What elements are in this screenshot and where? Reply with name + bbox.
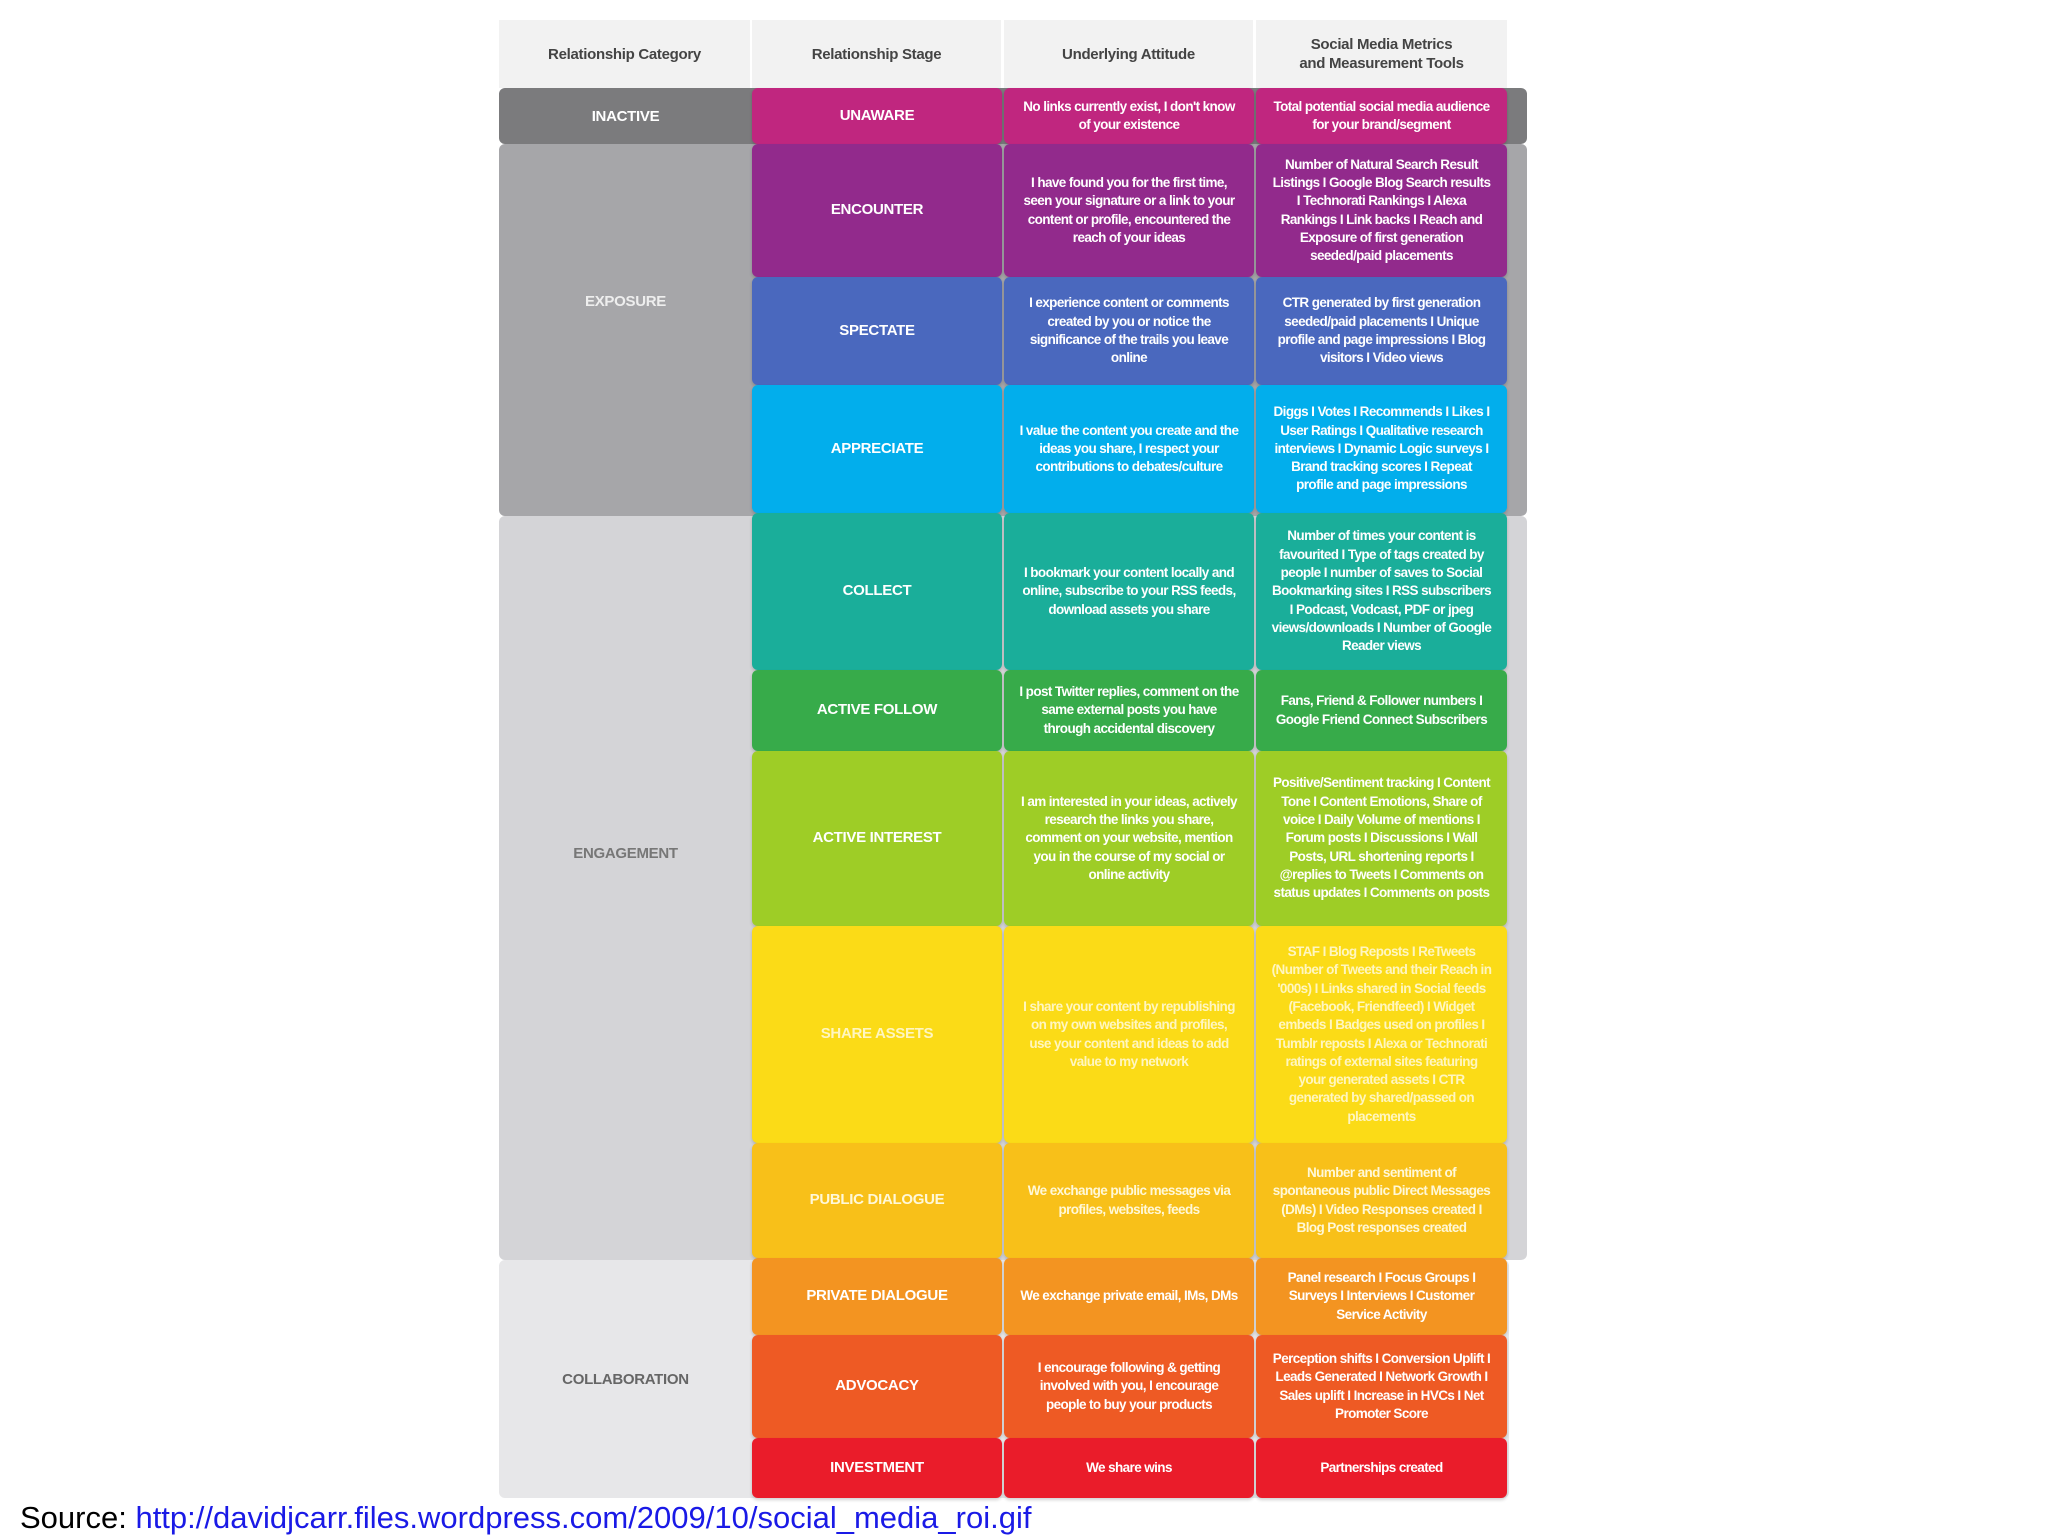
header: category — [499, 20, 750, 88]
text: Fans, Friend & Follower numbers I Google Friend Connect Subscribers — [1276, 693, 1487, 726]
text: Total potential social media audience for your brand/segment — [1273, 99, 1490, 132]
text: ACTIVE INTEREST — [813, 829, 941, 846]
text: Perception shifts I Conversion Uplift I Leads Generated I Network Growth I Sales uplift I Increase in HVCs I Net Promoter Score — [1273, 1351, 1490, 1421]
header: metrics — [1256, 20, 1507, 88]
text: I value the content you create and the ideas you share, I respect your contributions to debates/culture — [1020, 423, 1238, 474]
text: ACTIVE FOLLOW — [817, 701, 937, 718]
header: category: Relationship Category — [548, 46, 701, 62]
row: public dialogue — [750, 1143, 1508, 1260]
table header — [499, 20, 1507, 88]
header: attitude: Underlying Attitude — [1062, 46, 1195, 62]
row: encounter — [751, 144, 1508, 278]
text: CTR generated by first generation seeded/paid placements I Unique profile and page impressions I Blog visitors I Video views — [1278, 295, 1485, 365]
header: stage: Relationship Stage — [812, 46, 941, 62]
text: Partnerships created — [1320, 1460, 1443, 1475]
text: No links currently exist, I don't know of your existence — [1023, 99, 1235, 132]
text: UNAWARE — [840, 107, 914, 124]
header: stage — [752, 20, 1001, 88]
category: engagement: ENGAGEMENT — [573, 845, 678, 862]
row: appreciate — [751, 385, 1508, 514]
text: ENCOUNTER — [831, 201, 923, 218]
row: investment — [750, 1438, 1508, 1502]
category: collaboration — [499, 1260, 1509, 1498]
text: APPRECIATE — [831, 440, 923, 457]
row: active interest — [750, 751, 1508, 928]
text: We share wins — [1086, 1460, 1172, 1475]
category: engagement — [499, 516, 1527, 1260]
text: I post Twitter replies, comment on the same external posts you have through accidental discovery — [1019, 684, 1239, 736]
text: INVESTMENT — [830, 1459, 924, 1476]
category: exposure — [499, 144, 1527, 516]
text: COLLECT — [843, 582, 911, 599]
header: attitude — [1004, 20, 1253, 88]
text: I experience content or comments created by you or notice the significance of the trails you leave online — [1029, 295, 1229, 365]
text: I have found you for the first time, seen your signature or a link to your content or profile, encountered the reach of your ideas — [1023, 175, 1235, 245]
text: Diggs I Votes I Recommends I Likes I User Ratings I Qualitative research interviews I Dynamic Logic surveys I Brand tracking scores I Repeat profile and page impressions — [1274, 404, 1489, 492]
text: SHARE ASSETS — [821, 1025, 933, 1042]
row: private dialogue — [750, 1258, 1508, 1336]
row: collect — [750, 513, 1508, 672]
text: We exchange private email, IMs, DMs — [1020, 1288, 1238, 1303]
category: collaboration: COLLABORATION — [562, 1370, 689, 1388]
category: inactive: INACTIVE — [592, 108, 659, 124]
row: share assets — [750, 926, 1508, 1144]
row: advocacy — [750, 1335, 1508, 1440]
text: I am interested in your ideas, actively research the links you share, comment on your website, mention you in the course of my social or online activity — [1021, 794, 1237, 882]
category: exposure: EXPOSURE — [585, 293, 666, 310]
text: Positive/Sentiment tracking I Content Tone I Content Emotions, Share of voice I Daily Volume of mentions I Forum posts I Discussions I Wall Posts, URL shortening reports I @replies to Tweets I Comments on status updates I Comments on posts — [1273, 775, 1490, 900]
text: ADVOCACY — [835, 1377, 919, 1394]
text: We exchange public messages via profiles, websites, feeds — [1028, 1183, 1230, 1216]
text: I share your content by republishing on my own websites and profiles, use your content and ideas to add value to my network — [1023, 999, 1235, 1069]
text: STAF I Blog Reposts I ReTweets (Number of Tweets and their Reach in '000s) I Links shared in Social feeds (Facebook, Friendfeed) I Widget embeds I Badges used on profiles I Tumblr reposts I Alexa or Technorati ratings of external sites featuring your generated assets I CTR generated by shared/passed on placements — [1272, 944, 1491, 1124]
row: spectate — [751, 277, 1508, 386]
text: SPECTATE — [839, 322, 915, 339]
header: metrics: Social Media Metrics — [1311, 36, 1452, 53]
text: PUBLIC DIALOGUE — [810, 1191, 944, 1208]
text: Number and sentiment of spontaneous public Direct Messages (DMs) I Video Responses created I Blog Post responses created — [1273, 1165, 1490, 1235]
text: Panel research I Focus Groups I Surveys I Interviews I Customer Service Activity — [1288, 1270, 1475, 1322]
text: Number of Natural Search Result Listings I Google Blog Search results I Technorati Rankings I Alexa Rankings I Link backs I Reach and Exposure of first generation seeded/paid placements — [1273, 157, 1490, 263]
text: Number of times your content is favourited I Type of tags created by people I number of saves to Social Bookmarking sites I RSS subscribers I Podcast, Vodcast, PDF or jpeg views/downloads I Number of Google Reader views — [1272, 528, 1491, 653]
source line: Source: http://davidjcarr.files.wordpress.com/2009/10/social_media_roi.gif — [20, 1500, 1031, 1535]
text: I bookmark your content locally and online, subscribe to your RSS feeds, download assets you share — [1022, 565, 1236, 617]
text: I encourage following & getting involved with you, I encourage people to buy your products — [1038, 1360, 1220, 1412]
row: unaware — [752, 88, 1508, 145]
category: inactive — [499, 88, 1527, 144]
text: PRIVATE DIALOGUE — [806, 1287, 948, 1304]
row: active follow — [750, 670, 1508, 752]
header: metrics: and Measurement Tools — [1299, 55, 1464, 72]
